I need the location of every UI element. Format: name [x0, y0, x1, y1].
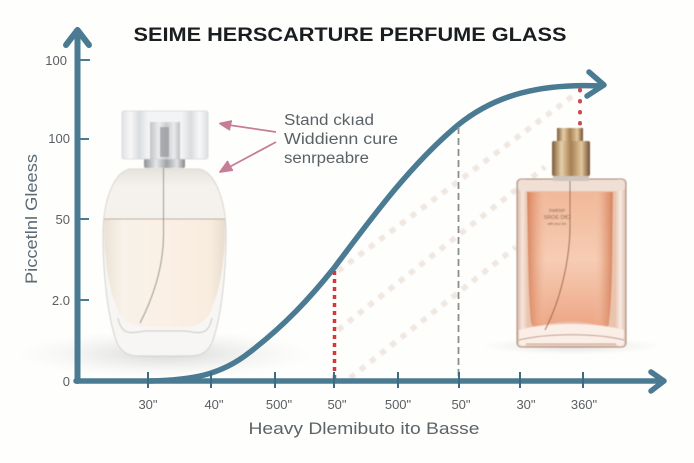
liquid [527, 192, 613, 327]
collar [144, 155, 185, 168]
x axis ticks [148, 372, 583, 388]
red dotted line: right [578, 90, 582, 125]
y axis [66, 30, 89, 381]
gold collar [552, 141, 590, 176]
gray dashed line [458, 127, 460, 381]
callout arrows [220, 121, 276, 172]
liquid surface [104, 218, 225, 220]
x axis [76, 372, 664, 391]
shadow: left bottle [15, 330, 315, 378]
callout text: senrpeabre [284, 150, 369, 167]
y axis labels: 100 [48, 131, 70, 146]
title: SEIME HERSCARTURE PERFUME GLASS [134, 24, 566, 46]
y axis labels: 50 [56, 212, 70, 227]
x axis labels: 500" [385, 397, 412, 412]
bottle label [544, 208, 571, 226]
bottle label: SWENP [549, 208, 565, 213]
cap [122, 111, 208, 159]
x axis labels: 360" [571, 397, 598, 412]
y axis labels: 2.0 [52, 293, 70, 308]
callout text: Widdienn cure [284, 131, 398, 148]
neck [553, 174, 589, 181]
glass top shoulder [518, 180, 625, 191]
bottle body [103, 169, 226, 356]
inner sprayer [150, 122, 180, 159]
bottle label: SROE DfO [544, 215, 571, 221]
x axis labels: 50" [451, 397, 471, 412]
glass base [118, 318, 212, 333]
x axis labels [138, 397, 598, 412]
s-curve with arrow [150, 72, 604, 381]
bottle label: efit eso tre [548, 221, 567, 226]
y axis labels: 100 [45, 53, 67, 68]
pale dotted guide lines [338, 95, 574, 378]
icon: right perfume bottle [517, 128, 626, 347]
x axis title: Heavy Dlemibuto ito Basse [248, 419, 480, 438]
shadow: right bottle [480, 337, 664, 355]
glass base [519, 324, 624, 345]
liquid side shading [527, 192, 613, 327]
gold cap [557, 128, 583, 141]
callout text: Stand ckıad [284, 112, 374, 129]
x axis labels: 50" [327, 397, 347, 412]
y axis labels: 0 [63, 374, 70, 389]
icon: left perfume bottle [103, 111, 226, 356]
x axis labels: 30" [138, 397, 158, 412]
callout text [284, 112, 398, 167]
red dotted line: left [333, 271, 336, 381]
liquid [104, 219, 225, 327]
x axis labels: 500" [266, 397, 293, 412]
upper glass [104, 169, 225, 219]
dip tube [140, 168, 164, 323]
base highlight lines [519, 335, 624, 344]
x axis labels: 30" [516, 397, 536, 412]
dip tube [545, 180, 570, 330]
y axis title: Piccetlnl Gleess [23, 154, 41, 284]
y axis ticks [80, 60, 90, 300]
x axis labels: 40" [204, 397, 224, 412]
glass body [517, 179, 626, 347]
y axis labels [45, 53, 70, 389]
